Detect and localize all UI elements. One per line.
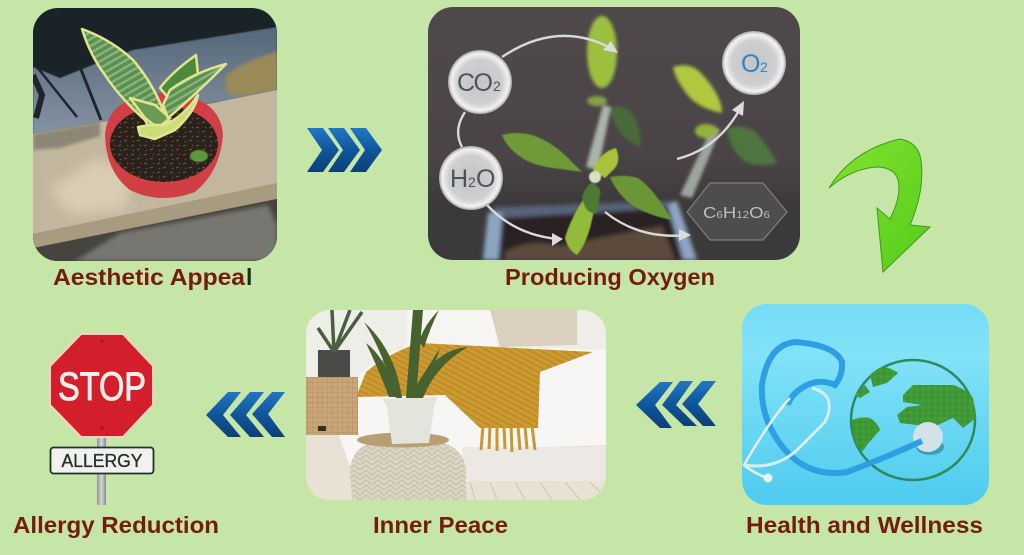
bed — [336, 345, 606, 481]
side table with dark pot — [306, 310, 362, 435]
label: inner peace: Inner Peace — [373, 512, 508, 538]
floor — [306, 435, 606, 500]
ledge front face — [33, 183, 277, 248]
molecule: O2 — [722, 31, 786, 95]
arrow: chevrons right — [307, 128, 382, 172]
molecule: O2: 2 — [760, 59, 768, 75]
arrow: chevrons left lower — [206, 392, 285, 437]
headboard — [407, 310, 497, 346]
stop octagon — [50, 334, 153, 437]
snake plant leaves — [364, 310, 468, 398]
molecule: H2O: O — [476, 165, 495, 193]
molecule: H2O — [439, 146, 503, 210]
stop octagon: STOP — [58, 365, 146, 409]
white plant pot — [383, 397, 437, 444]
label: producing oxygen: Producing Oxygen — [505, 264, 715, 290]
soil — [110, 106, 218, 182]
label: allergy reduction: Allergy Reduction — [13, 512, 219, 538]
molecule: CO2 — [448, 50, 512, 114]
molecule: H2O: H — [450, 165, 468, 193]
mustard throw — [356, 343, 593, 452]
ground gravel — [33, 199, 277, 261]
molecule: O2: O — [741, 50, 760, 78]
globe — [851, 360, 976, 480]
macrame pouf — [350, 432, 466, 500]
sprout — [190, 150, 208, 162]
panel: inner peace photo — [306, 310, 606, 500]
glucose hexagon: C6H12O6 — [703, 205, 771, 222]
label: aesthetic appeal: Aesthetic Appea — [53, 264, 245, 290]
blurred plant pot and soil — [483, 201, 697, 260]
panel: health and wellness photo — [742, 304, 989, 505]
back seedlings — [586, 16, 777, 198]
molecule: CO2: 2 — [493, 78, 501, 94]
label: aesthetic appeal: l — [246, 264, 252, 290]
molecule: CO2: CO — [457, 69, 493, 97]
dry grass — [226, 52, 277, 96]
cushion — [490, 310, 577, 347]
panel: aesthetic appeal photo — [33, 8, 277, 261]
allergy plate: ALLERGY — [62, 451, 142, 471]
reflective water surface — [33, 27, 277, 135]
label: health and wellness: Health and Wellness — [746, 512, 983, 538]
glucose hexagon — [687, 183, 787, 240]
fringe — [481, 426, 535, 452]
panel: producing oxygen photo — [428, 7, 800, 260]
concrete ledge — [33, 90, 277, 234]
sign post — [97, 437, 106, 505]
pot — [105, 93, 223, 198]
central seedling — [502, 133, 672, 255]
arrow: chevrons left upper — [636, 381, 716, 428]
allergy plate — [50, 448, 154, 474]
process arrows — [458, 36, 742, 239]
icon: allergy stop sign — [50, 334, 154, 505]
snake plant leaves — [82, 29, 226, 139]
molecule: H2O: 2 — [468, 174, 476, 190]
arrow: green curved arrow — [829, 139, 930, 272]
stethoscope — [744, 342, 922, 482]
